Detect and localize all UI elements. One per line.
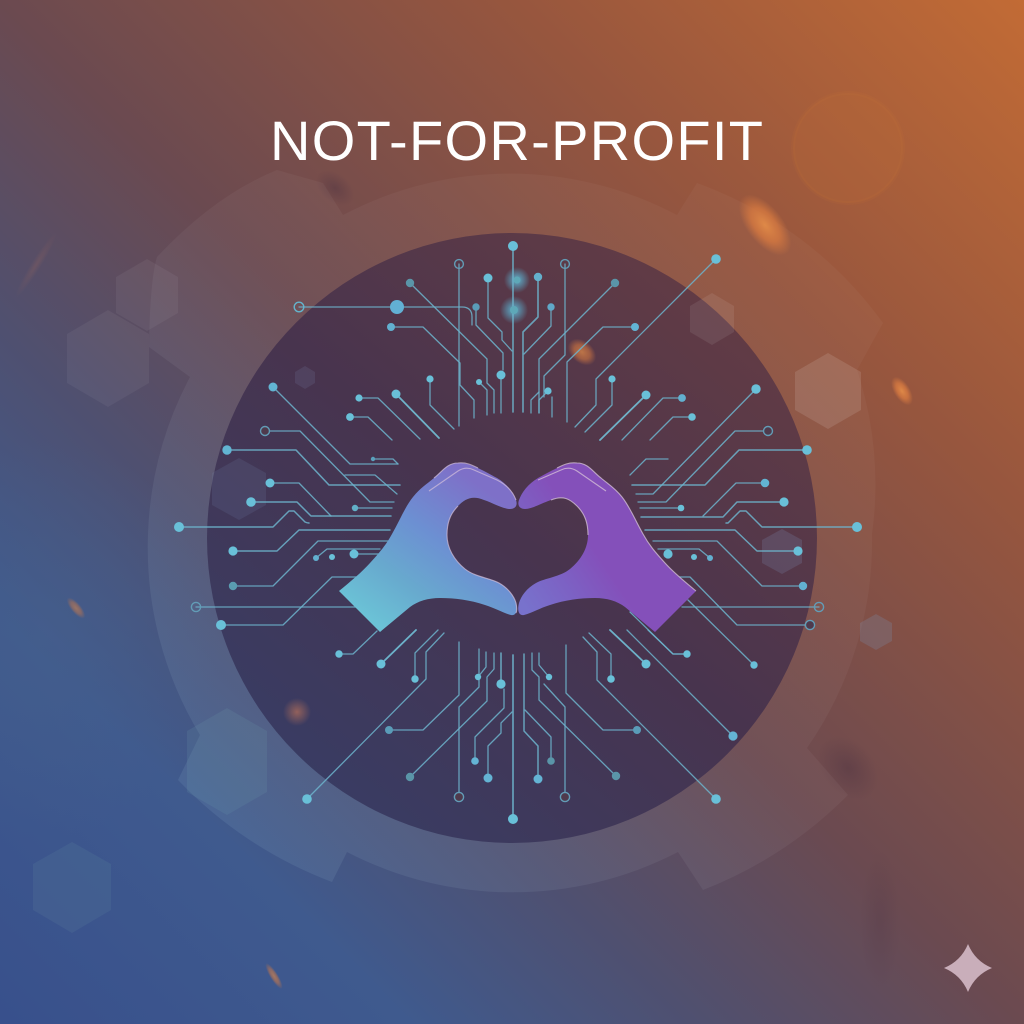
circuit: bottom traces bbox=[307, 630, 733, 819]
circuit: right traces bbox=[630, 389, 857, 665]
right hand highlights bbox=[538, 463, 696, 591]
icon: sparkle bbox=[944, 944, 992, 992]
lens flare circle bbox=[793, 93, 903, 203]
title: NOT-FOR-PROFIT bbox=[270, 109, 763, 172]
central dark disc bbox=[207, 233, 817, 843]
background soft blobs bbox=[0, 163, 900, 990]
glows and flares bbox=[12, 186, 917, 991]
circuit: left traces bbox=[179, 387, 400, 654]
circuit: top traces bbox=[299, 246, 716, 440]
right hand bbox=[518, 463, 696, 632]
left hand highlights bbox=[429, 463, 517, 613]
icon: heart hands bbox=[339, 463, 696, 632]
left hand bbox=[339, 463, 517, 632]
circuit nodes bbox=[174, 241, 862, 824]
hexagons bbox=[33, 259, 892, 933]
gear ring bbox=[148, 170, 883, 892]
circuit hollow ring nodes bbox=[191, 260, 824, 802]
